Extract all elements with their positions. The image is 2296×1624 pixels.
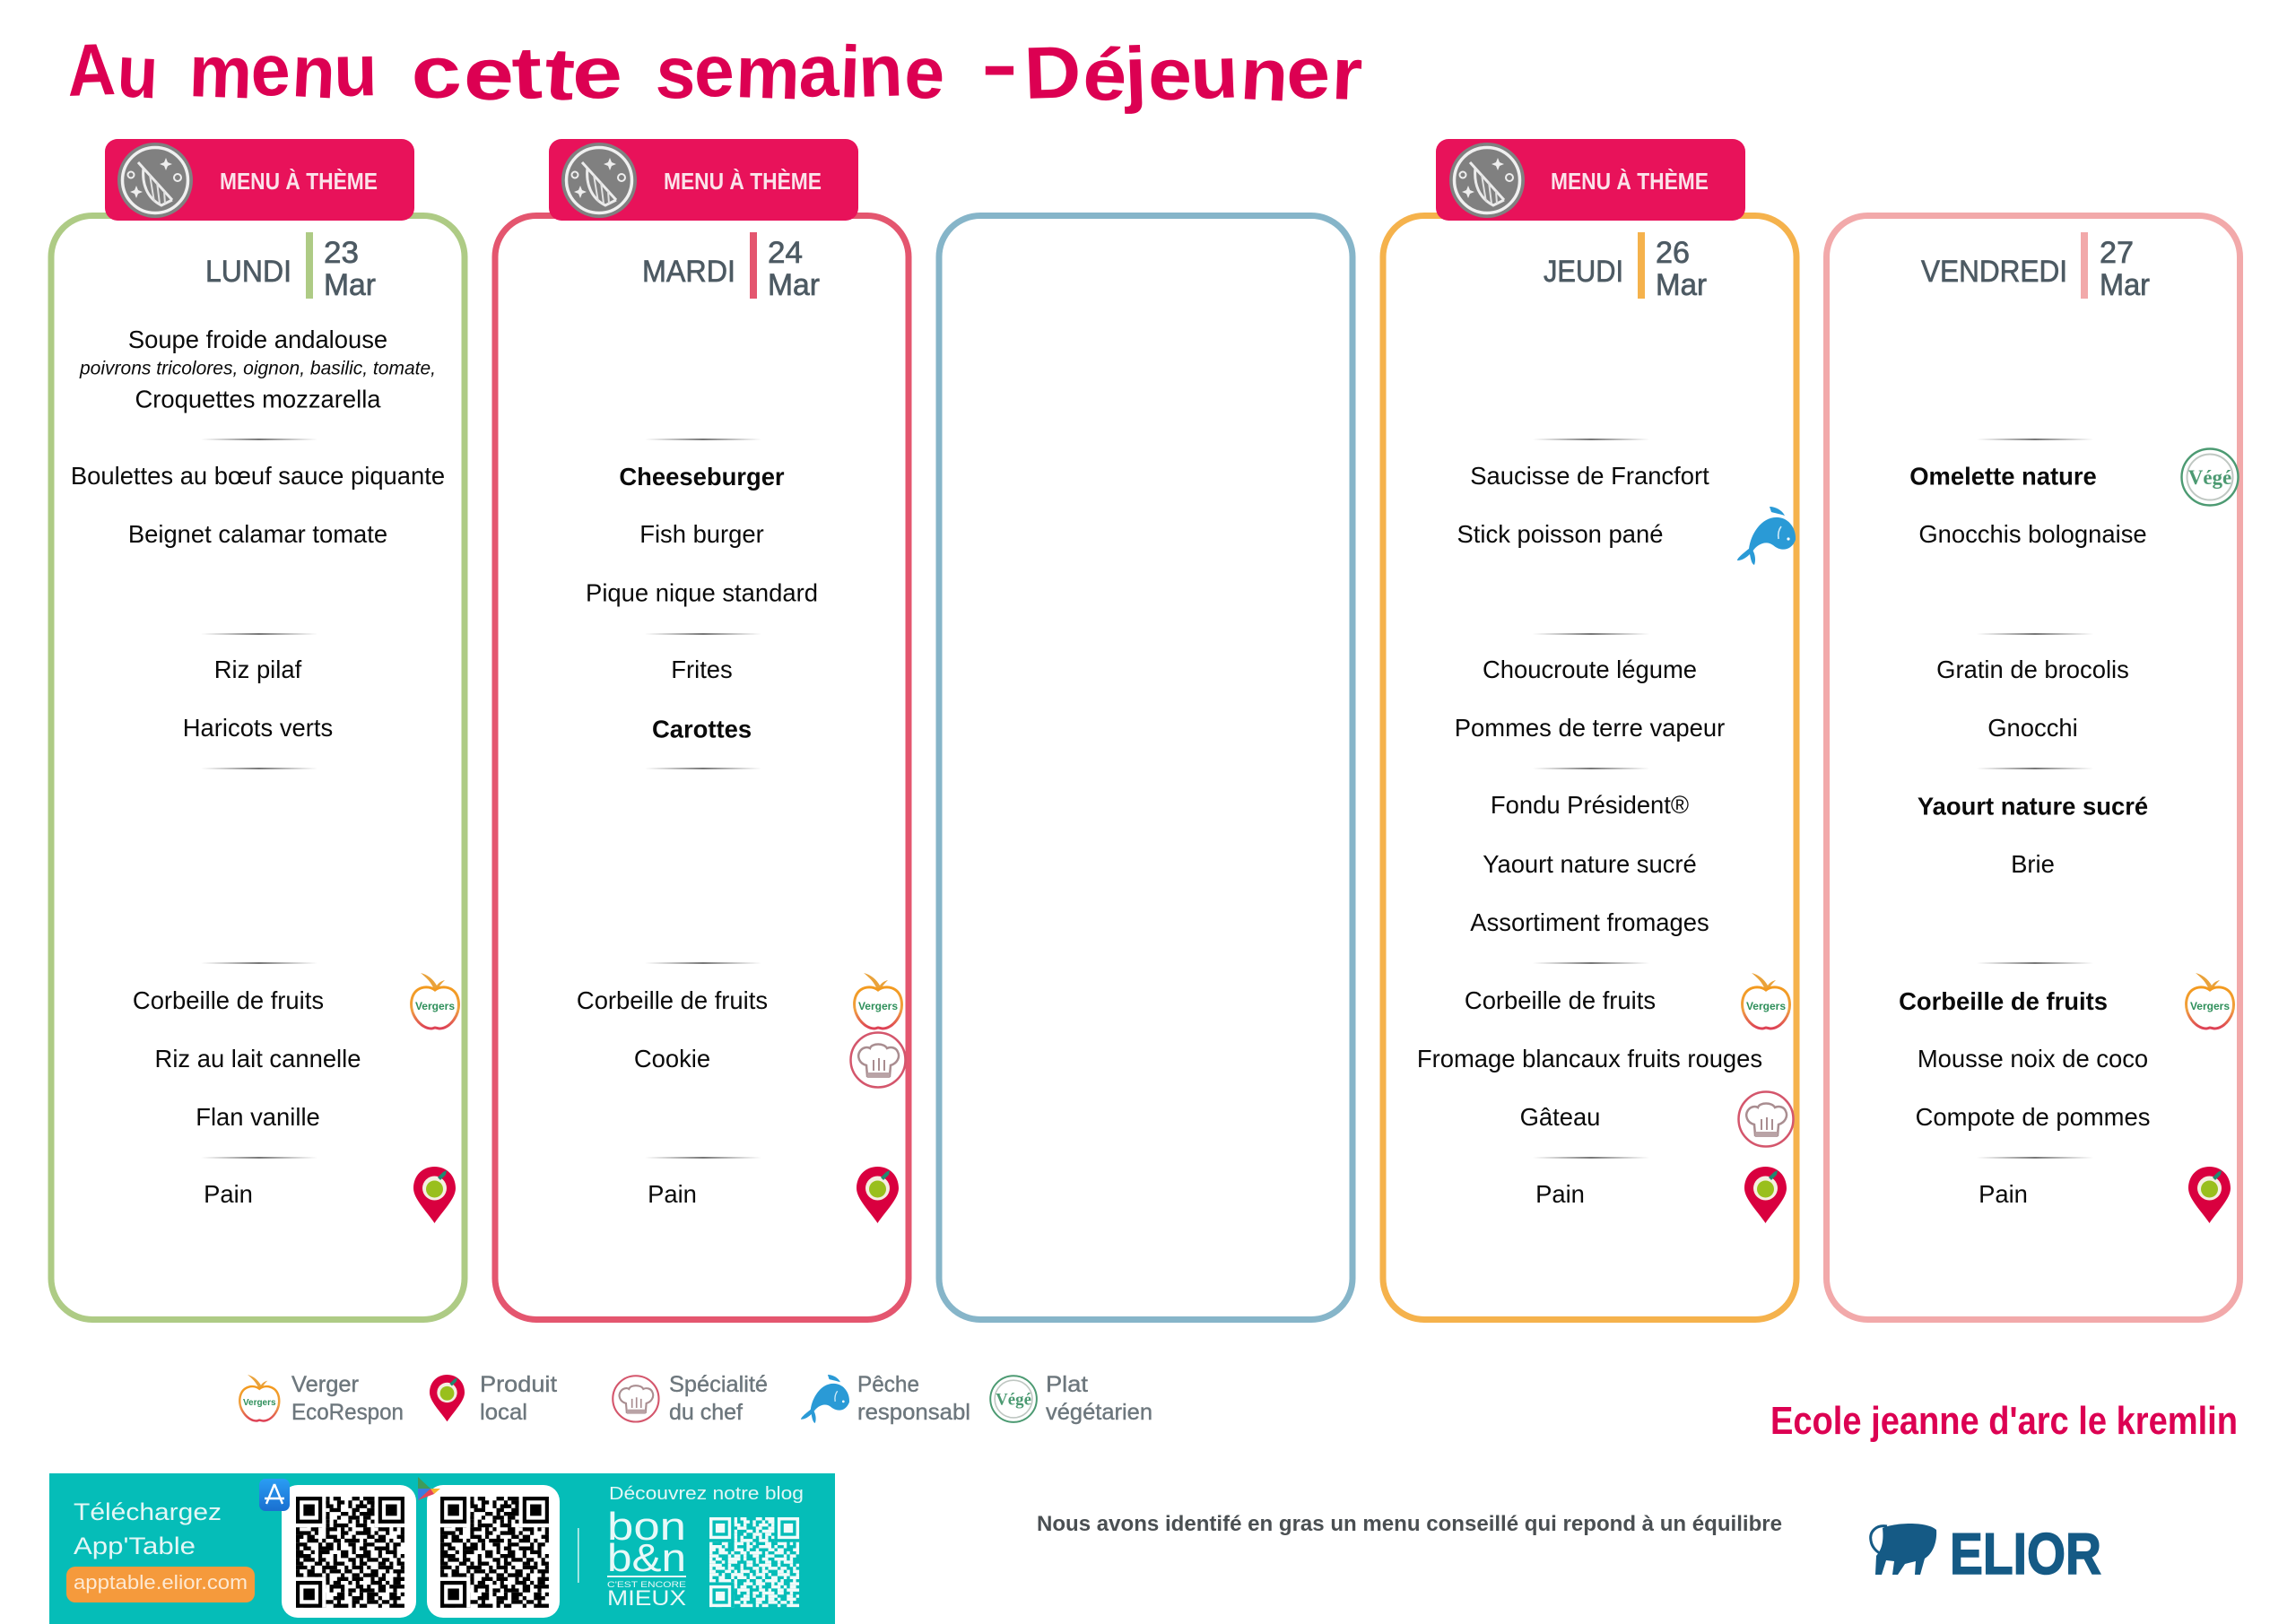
legend item: pêche responsable: responsabl [857, 1400, 970, 1425]
menu items: Haricots verts [183, 714, 333, 742]
menu items: Soupe froide andalouse [128, 326, 387, 353]
icon: spécialité du chef [1738, 1092, 1794, 1146]
url button [66, 1567, 255, 1602]
day heading: 24 [768, 236, 803, 270]
legend item: spécialité du chef [613, 1372, 768, 1425]
menu items: Frites [671, 656, 733, 683]
menu items: Gnocchi [1987, 714, 2078, 742]
menu items: Yaourt nature sucré [1483, 850, 1697, 878]
day heading: Mar [768, 268, 820, 302]
icon: app store [259, 1479, 290, 1511]
day heading: MARDI [642, 255, 735, 289]
icon: verger: Vergers [415, 1000, 455, 1012]
blog heading: Découvrez notre blog [609, 1484, 804, 1504]
icon: verger [412, 973, 458, 1029]
menu items: Compote de pommes [1916, 1103, 2150, 1131]
menu items: Omelette nature [1909, 463, 2097, 490]
menu items: Cookie [634, 1045, 710, 1073]
icon: produit local [857, 1167, 899, 1223]
icon: spécialité du chef [850, 1033, 906, 1087]
day heading: Mar [324, 268, 376, 302]
menu items: Brie [2011, 850, 2055, 878]
legend [239, 1372, 1152, 1425]
download heading [74, 1498, 222, 1559]
menu items: Riz pilaf [214, 656, 302, 683]
divider [578, 1528, 579, 1583]
logo: bon & bon: C'EST ENCORE [607, 1580, 686, 1589]
theme badge: MENU À THÈME [1551, 168, 1709, 195]
legend item: plat végétarien [990, 1372, 1152, 1425]
day heading [1544, 232, 1707, 302]
icon: plat végétarien: Végé [2188, 466, 2231, 489]
legend item: verger: Verger [291, 1372, 359, 1397]
note: Nous avons identifé en gras un menu conseillé qui repond à un équilibre [1037, 1512, 1782, 1536]
logo: elior [1871, 1521, 2101, 1586]
legend item: pêche responsable [801, 1372, 970, 1425]
legend item: verger: Vergers [243, 1398, 276, 1408]
menu items [577, 463, 818, 1208]
title: Au [65, 29, 161, 114]
title: semaine [654, 30, 947, 115]
qr code: blog [709, 1517, 799, 1607]
theme badge [1436, 139, 1745, 221]
title: Déjeuner [1022, 31, 1364, 117]
menu items: Carottes [652, 716, 752, 743]
panel: mardi [495, 139, 909, 1320]
menu items [1899, 463, 2150, 1208]
theme badge [105, 139, 414, 221]
logo: bon & bon: b&n [607, 1536, 686, 1580]
menu items: Fondu Président® [1491, 791, 1689, 819]
day heading [205, 232, 376, 302]
panel: jeudi [1383, 139, 1796, 1320]
icon: verger: Vergers [858, 1000, 898, 1012]
dividers [645, 439, 761, 1159]
icon: verger [855, 973, 901, 1029]
day heading [1921, 232, 2150, 302]
menu items: Pain [648, 1180, 697, 1208]
download heading: App'Table [74, 1533, 196, 1559]
logo: elior: ELIOR [1950, 1521, 2101, 1586]
legend item: pêche responsable: Pêche [857, 1372, 919, 1397]
legend item: plat végétarien: végétarien [1046, 1400, 1152, 1425]
theme badge [549, 139, 858, 221]
icon: verger: Vergers [1746, 1000, 1786, 1012]
menu items [71, 326, 445, 1208]
theme badge: MENU À THÈME [220, 168, 378, 195]
logo: bon & bon: MIEUX [607, 1586, 686, 1611]
legend item: plat végétarien: Végé [996, 1391, 1031, 1410]
icon: google play [418, 1477, 440, 1500]
qr code: google play [427, 1485, 560, 1618]
menu items: Cheeseburger [619, 463, 785, 491]
legend item: produit local: Produit [480, 1372, 557, 1397]
menu items: Beignet calamar tomate [128, 520, 387, 548]
icon: plat végétarien [2181, 448, 2239, 506]
menu items: Fromage blancaux fruits rouges [1417, 1045, 1762, 1073]
menu items: Choucroute légume [1483, 656, 1697, 683]
menu items [1417, 462, 1762, 1208]
title [65, 24, 1364, 117]
menu items: Pommes de terre vapeur [1455, 714, 1725, 742]
menu items: Gâteau [1520, 1103, 1600, 1131]
icon: verger: Vergers [2190, 1000, 2230, 1012]
menu items: Saucisse de Francfort [1470, 462, 1709, 490]
menu items: poivrons tricolores, oignon, basilic, tomate, [79, 357, 436, 378]
menu items: Croquettes mozzarella [135, 386, 381, 413]
menu items: Corbeille de fruits [1899, 987, 2108, 1015]
icon: pêche responsable [1737, 507, 1796, 565]
day heading [642, 232, 820, 302]
menu items: Corbeille de fruits [133, 986, 324, 1014]
menu items: Gratin de brocolis [1936, 656, 2129, 683]
menu items: Pique nique standard [586, 579, 818, 606]
icon: verger [2187, 973, 2233, 1029]
legend item: produit local [430, 1372, 557, 1425]
day heading: LUNDI [205, 255, 291, 289]
menu items: Gnocchis bolognaise [1918, 520, 2147, 548]
legend item: verger [239, 1372, 404, 1425]
legend item: produit local: local [480, 1400, 527, 1425]
menu items: Assortiment fromages [1470, 908, 1709, 936]
menu items: Stick poisson pané [1457, 520, 1663, 548]
school name: Ecole jeanne d'arc le kremlin [1770, 1399, 2238, 1443]
panel: mercredi (vide) [939, 215, 1352, 1320]
menu items: Fish burger [639, 520, 764, 548]
day heading: Mar [1656, 268, 1707, 302]
dividers [1533, 439, 1649, 1159]
legend item: verger: EcoRespon [291, 1400, 404, 1425]
menu items: Pain [204, 1180, 253, 1208]
dividers [201, 439, 317, 1159]
legend item: spécialité du chef: Spécialité [669, 1372, 768, 1397]
menu items: Yaourt nature sucré [1918, 793, 2148, 820]
download heading: Téléchargez [74, 1498, 222, 1525]
menu items: Pain [1535, 1180, 1585, 1208]
menu items: Corbeille de fruits [577, 986, 768, 1014]
day heading: 23 [324, 236, 359, 270]
logo: bon & bon [607, 1505, 686, 1611]
menu items: Corbeille de fruits [1465, 986, 1656, 1014]
title: - [981, 24, 1018, 106]
app banner [49, 1473, 835, 1624]
menu items: Riz au lait cannelle [155, 1045, 361, 1073]
menu items: Pain [1979, 1180, 2028, 1208]
day heading: JEUDI [1544, 255, 1623, 289]
title: cette [409, 30, 624, 117]
menu items: Mousse noix de coco [1918, 1045, 2148, 1073]
qr code: app store [282, 1485, 416, 1618]
legend item: plat végétarien: Plat [1046, 1372, 1088, 1397]
menu items: Boulettes au bœuf sauce piquante [71, 462, 445, 490]
day heading: VENDREDI [1921, 255, 2067, 289]
day heading: Mar [2100, 268, 2150, 302]
day heading: 26 [1656, 236, 1690, 270]
icon: verger [1743, 973, 1789, 1029]
panel: lundi [51, 139, 465, 1320]
logo: bon & bon: bon [607, 1505, 686, 1549]
title: menu [187, 30, 378, 115]
theme badge: MENU À THÈME [664, 168, 822, 195]
icon: produit local [1744, 1167, 1787, 1223]
panel: vendredi [1826, 215, 2240, 1320]
day heading: 27 [2100, 236, 2134, 270]
icon: produit local [413, 1167, 456, 1223]
url button: apptable.elior.com [74, 1571, 248, 1594]
legend item: spécialité du chef: du chef [669, 1400, 743, 1425]
icon: produit local [2188, 1167, 2231, 1223]
menu items: Flan vanille [196, 1103, 320, 1131]
dividers [1977, 439, 2093, 1159]
